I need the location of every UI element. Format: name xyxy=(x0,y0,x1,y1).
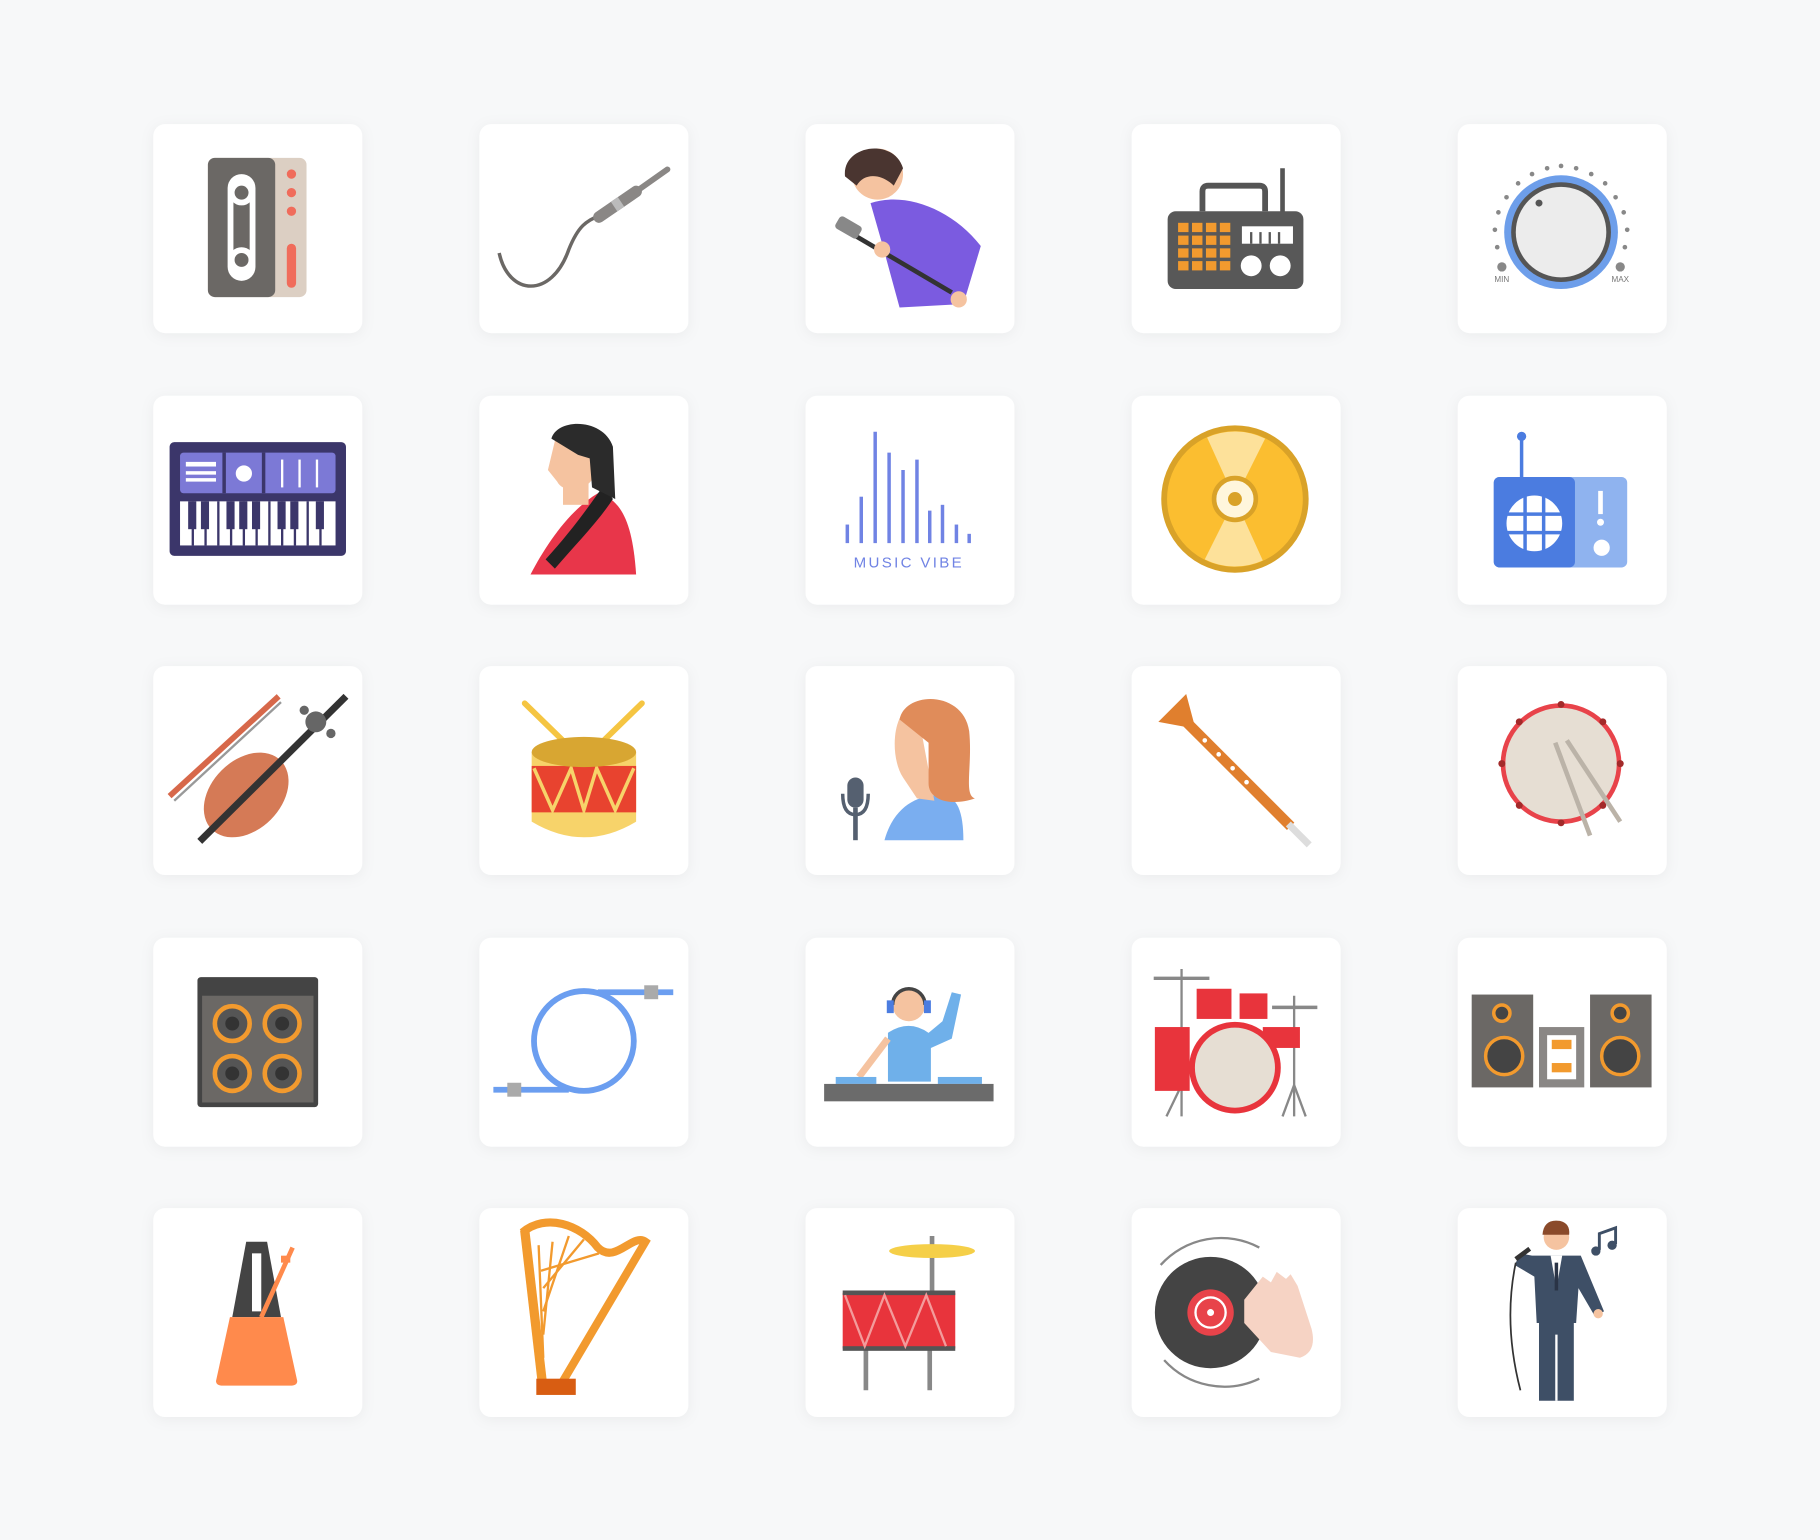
icon: portable radio xyxy=(1494,432,1627,567)
card: drum xyxy=(479,666,688,875)
text: music vibe: MUSIC VIBE xyxy=(854,554,964,571)
icon: vinyl with hand xyxy=(1155,1238,1313,1387)
card: radio xyxy=(1132,124,1341,333)
icon: man singing xyxy=(1510,1221,1617,1401)
icon: compact disc xyxy=(1164,428,1306,570)
card: clarinet xyxy=(1132,666,1341,875)
card: singer in suit xyxy=(1458,1208,1667,1417)
icon: sound bars xyxy=(847,432,969,543)
icon: metronome xyxy=(216,1242,297,1386)
card: amplifier xyxy=(153,938,362,1147)
icon: speakers xyxy=(1472,995,1652,1087)
card: synthesizer xyxy=(153,396,362,605)
icon: knob xyxy=(1493,164,1630,289)
icon: amplifier xyxy=(197,977,318,1107)
card: harp xyxy=(479,1208,688,1417)
card: snare top view xyxy=(1458,666,1667,875)
card: singer xyxy=(806,124,1014,333)
icon: drum and cymbal xyxy=(843,1236,975,1390)
icon: cassette xyxy=(208,158,307,297)
icon: dj xyxy=(824,989,994,1101)
card: stereo speakers xyxy=(1458,938,1667,1147)
icon: knob: MIN xyxy=(1494,275,1509,284)
icon: drum kit xyxy=(1154,969,1317,1116)
icon: singer with mic xyxy=(834,148,981,308)
icon: jack cable xyxy=(499,169,667,286)
card: drum with cymbal xyxy=(806,1208,1014,1417)
card: volume knob xyxy=(1458,124,1667,333)
card: turntable scratch xyxy=(1132,1208,1341,1417)
icon: radio xyxy=(1168,168,1303,289)
card: metronome xyxy=(153,1208,362,1417)
card: man profile xyxy=(479,396,688,605)
card: cassette xyxy=(153,124,362,333)
card: audio cable xyxy=(479,124,688,333)
card: DJ xyxy=(806,938,1014,1147)
icon: woman singer xyxy=(843,699,975,840)
icon: synthesizer keyboard xyxy=(170,442,346,556)
icon: cable loop xyxy=(493,985,673,1097)
card: coiled cable xyxy=(479,938,688,1147)
icon: knob: MAX xyxy=(1611,275,1630,284)
card: CD xyxy=(1132,396,1341,605)
icon: man profile xyxy=(531,424,636,574)
card: violin xyxy=(153,666,362,875)
icon: clarinet xyxy=(1158,694,1309,845)
icon: snare drum with sticks xyxy=(1498,701,1624,836)
icon: harp xyxy=(522,1222,645,1395)
card: music vibe xyxy=(806,396,1014,605)
icon: drum xyxy=(525,703,642,837)
card: blue radio xyxy=(1458,396,1667,605)
card: woman with mic xyxy=(806,666,1014,875)
card: drum kit xyxy=(1132,938,1341,1147)
icon: violin and bow xyxy=(170,696,346,854)
